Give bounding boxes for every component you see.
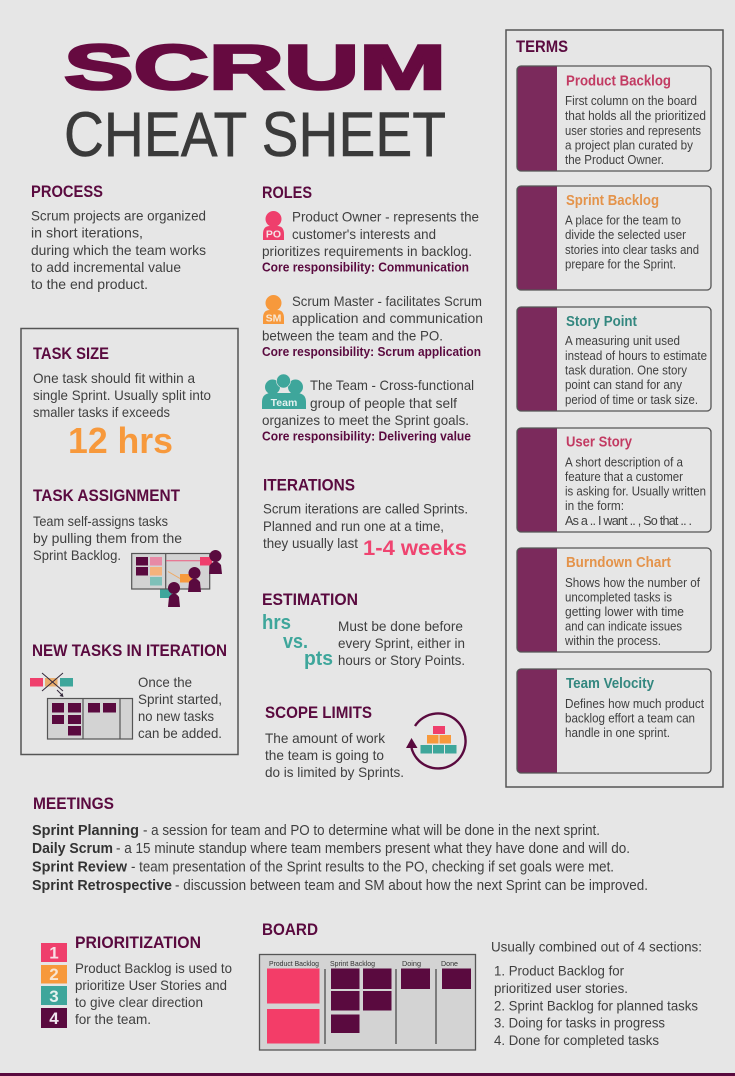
term card: user story: in the form: — [565, 499, 624, 513]
term card: sprint backlog: A place for the team to — [565, 214, 681, 228]
panel: estimation: Must be done before — [338, 619, 463, 634]
task assignment: Sprint Backlog. — [33, 548, 121, 563]
term card: story point: A measuring unit used — [565, 334, 680, 348]
panel: roles: prioritizes requirements in backlog. — [262, 244, 472, 259]
icon: numbered priority stack: 2 — [49, 965, 59, 984]
panel: meetings — [32, 794, 648, 894]
icon: crossed-out new tasks and board — [30, 673, 132, 739]
panel: process: to the end product. — [31, 277, 148, 292]
term card: product backlog: Product Backlog — [566, 74, 671, 90]
panel: task box — [21, 328, 238, 754]
icon: numbered priority stack: 1 — [49, 944, 59, 962]
term card: sprint backlog: prepare for the Sprint. — [565, 258, 676, 272]
task size — [33, 344, 211, 461]
term card: product backlog: the Product Owner. — [565, 153, 664, 167]
panel: iterations: Scrum iterations are called Sprints. — [263, 502, 468, 516]
panel: process: during which the team works — [31, 243, 206, 258]
term card: burndown chart: Burndown Chart — [566, 555, 671, 571]
term card: burndown chart — [517, 548, 711, 652]
term card: user story: feature that a customer — [565, 470, 683, 484]
panel: process: to add incremental value — [31, 260, 181, 275]
panel: prioritization: prioritize User Stories and — [75, 978, 227, 993]
panel: roles: group of people that self — [310, 396, 457, 411]
board sections list: 3. Doing for tasks in progress — [494, 1016, 665, 1031]
term card: user story — [517, 428, 711, 532]
new tasks in iteration: can be added. — [138, 726, 222, 741]
panel: meetings: MEETINGS — [33, 794, 114, 813]
term card: product backlog: a project plan curated by — [565, 138, 694, 152]
task assignment — [33, 486, 182, 563]
board sections list: 1. Product Backlog for — [494, 964, 624, 979]
panel: roles: Core responsibility: Delivering value — [262, 428, 471, 444]
term card: product backlog: user stories and represents — [565, 124, 701, 138]
panel: prioritization — [41, 933, 232, 1028]
term card: user story: User Story — [566, 434, 632, 450]
panel: meetings: - team presentation of the Sprint results to the PO, checking if set goals were met. — [131, 860, 614, 876]
board diagram — [260, 954, 476, 1050]
board diagram: Sprint Backlog — [330, 959, 375, 968]
term card: team velocity — [517, 669, 711, 773]
panel: roles: Core responsibility: Scrum application — [262, 344, 481, 359]
icon: the team — [262, 374, 306, 409]
task size: single Sprint. Usually split into — [33, 388, 211, 403]
panel: roles: The Team - Cross-functional — [310, 378, 474, 393]
panel: iterations: Planned and run one at a time, — [263, 519, 444, 534]
panel: board: BOARD — [262, 920, 318, 939]
icon: product owner — [263, 211, 284, 240]
panel: roles: organizes to meet the Sprint goals. — [262, 413, 469, 428]
term card: user story: A short description of a — [565, 456, 683, 470]
panel: meetings: Sprint Retrospective — [32, 878, 172, 894]
term card: product backlog: that holds all the prioritized — [565, 109, 706, 123]
task size: One task should fit within a — [33, 371, 195, 386]
panel: roles: ROLES — [262, 183, 312, 202]
panel: estimation — [262, 590, 465, 670]
term card: product backlog: First column on the board — [565, 94, 697, 108]
panel: roles: Scrum Master - facilitates Scrum — [292, 294, 482, 309]
panel: estimation: hrs — [262, 612, 291, 634]
panel: scope limits: the team is going to — [265, 748, 384, 763]
panel: terms — [506, 30, 723, 787]
panel: prioritization: Product Backlog is used to — [75, 961, 232, 976]
icon: the team: Team — [271, 397, 297, 409]
panel: board — [260, 920, 702, 1050]
term card: team velocity: Defines how much product — [565, 697, 704, 711]
panel: scope limits: SCOPE LIMITS — [265, 703, 372, 722]
icon: numbered priority stack: 3 — [49, 987, 59, 1006]
term card: team velocity: handle in one sprint. — [565, 726, 670, 740]
task assignment: Team self-assigns tasks — [33, 514, 168, 529]
new tasks in iteration: no new tasks — [138, 709, 214, 724]
panel: process: PROCESS — [31, 182, 103, 201]
icon: work pyramid in sprint cycle — [406, 713, 466, 768]
panel: roles: application and communication — [292, 311, 483, 326]
panel: scope limits — [265, 703, 466, 780]
panel: scope limits: The amount of work — [265, 731, 385, 746]
task assignment: TASK ASSIGNMENT — [33, 486, 181, 505]
term card: team velocity: Team Velocity — [566, 676, 654, 692]
panel: terms: TERMS — [516, 37, 568, 56]
panel: meetings: Sprint Planning — [32, 823, 139, 839]
term card: sprint backlog: Sprint Backlog — [566, 193, 659, 209]
panel: estimation: ESTIMATION — [262, 590, 358, 609]
panel: meetings: - a session for team and PO to determine what will be done in the next sprint. — [143, 823, 600, 839]
term card: burndown chart: within the process. — [564, 634, 661, 648]
term card: burndown chart: and can indicate issues — [565, 620, 682, 634]
panel: iterations: they usually last — [263, 536, 358, 551]
panel: estimation: every Sprint, either in — [338, 636, 465, 651]
term card: sprint backlog: stories into clear tasks and — [565, 243, 699, 257]
panel: iterations — [263, 476, 468, 560]
panel: roles: Core responsibility: Communication — [262, 260, 469, 274]
new tasks in iteration: Sprint started, — [138, 692, 222, 707]
board diagram: Doing — [402, 959, 421, 968]
term card: product backlog — [517, 66, 711, 171]
term card: story point — [517, 307, 711, 411]
icon: product owner: PO — [266, 228, 281, 240]
term card: user story: As a .. I want .. , So that .. . — [565, 514, 692, 528]
task size: smaller tasks if exceeds — [33, 405, 170, 420]
title — [64, 33, 446, 170]
board sections list: 2. Sprint Backlog for planned tasks — [494, 999, 698, 1014]
panel: prioritization: PRIORITIZATION — [75, 933, 201, 952]
panel: estimation: hours or Story Points. — [338, 653, 465, 668]
term card: story point: period of time or task size. — [565, 393, 698, 407]
board sections list: prioritized user stories. — [494, 981, 628, 996]
new tasks in iteration: Once the — [138, 675, 192, 690]
panel: estimation: vs. — [283, 631, 308, 653]
term card: user story: is asking for. Usually written — [565, 484, 706, 498]
icon: team pulling tasks from board — [132, 550, 222, 607]
panel: scope limits: do is limited by Sprints. — [265, 765, 404, 780]
new tasks in iteration: NEW TASKS IN ITERATION — [32, 641, 227, 660]
term card: burndown chart: uncompleted tasks is — [565, 590, 672, 604]
panel: meetings: - discussion between team and SM about how the next Sprint can be improved. — [175, 878, 648, 894]
board diagram: Done — [441, 959, 458, 968]
panel: roles: Product Owner - represents the — [292, 210, 479, 224]
task assignment: by pulling them from the — [33, 531, 182, 546]
icon: numbered priority stack: 4 — [49, 1009, 59, 1028]
panel: meetings: Daily Scrum — [32, 841, 113, 857]
panel: process: Scrum projects are organized — [31, 208, 206, 224]
board diagram: Product Backlog — [269, 959, 319, 968]
new tasks in iteration — [32, 641, 227, 741]
term card: story point: point can stand for any — [565, 378, 683, 392]
board sections list — [491, 940, 702, 1048]
panel: estimation: pts — [304, 648, 333, 670]
panel: meetings: - a 15 minute standup where team members present what they have done and will do. — [116, 841, 630, 857]
icon: scrum master: SM — [266, 312, 282, 324]
term card: sprint backlog: divide the selected user — [565, 228, 686, 242]
panel: iterations: ITERATIONS — [263, 476, 355, 494]
board sections list: 4. Done for completed tasks — [494, 1033, 659, 1048]
panel: meetings: Sprint Review — [32, 860, 128, 876]
board sections list: Usually combined out of 4 sections: — [491, 940, 702, 955]
icon: numbered priority stack — [41, 943, 67, 1028]
icon: scrum master — [263, 295, 284, 324]
task size: 12 hrs — [68, 420, 173, 461]
panel: roles: between the team and the PO. — [262, 328, 443, 344]
panel: iterations: 1-4 weeks — [363, 537, 467, 560]
title: SCRUM — [64, 33, 446, 103]
term card: story point: Story Point — [566, 314, 637, 330]
panel: prioritization: for the team. — [75, 1012, 151, 1027]
task size: TASK SIZE — [33, 344, 109, 363]
panel: process: in short iterations, — [31, 226, 143, 240]
title: CHEAT SHEET — [64, 100, 446, 170]
term card: team velocity: backlog effort a team can — [565, 712, 695, 726]
panel: roles — [262, 183, 483, 444]
term card: burndown chart: getting lower with time — [565, 605, 684, 619]
term card: sprint backlog — [517, 186, 711, 290]
panel: roles: customer's interests and — [292, 227, 436, 242]
term card: story point: task duration. One story — [565, 364, 688, 378]
panel: prioritization: to give clear direction — [75, 995, 203, 1010]
panel: process — [31, 182, 206, 292]
term card: story point: instead of hours to estimate — [565, 349, 707, 363]
term card: burndown chart: Shows how the number of — [565, 576, 700, 590]
